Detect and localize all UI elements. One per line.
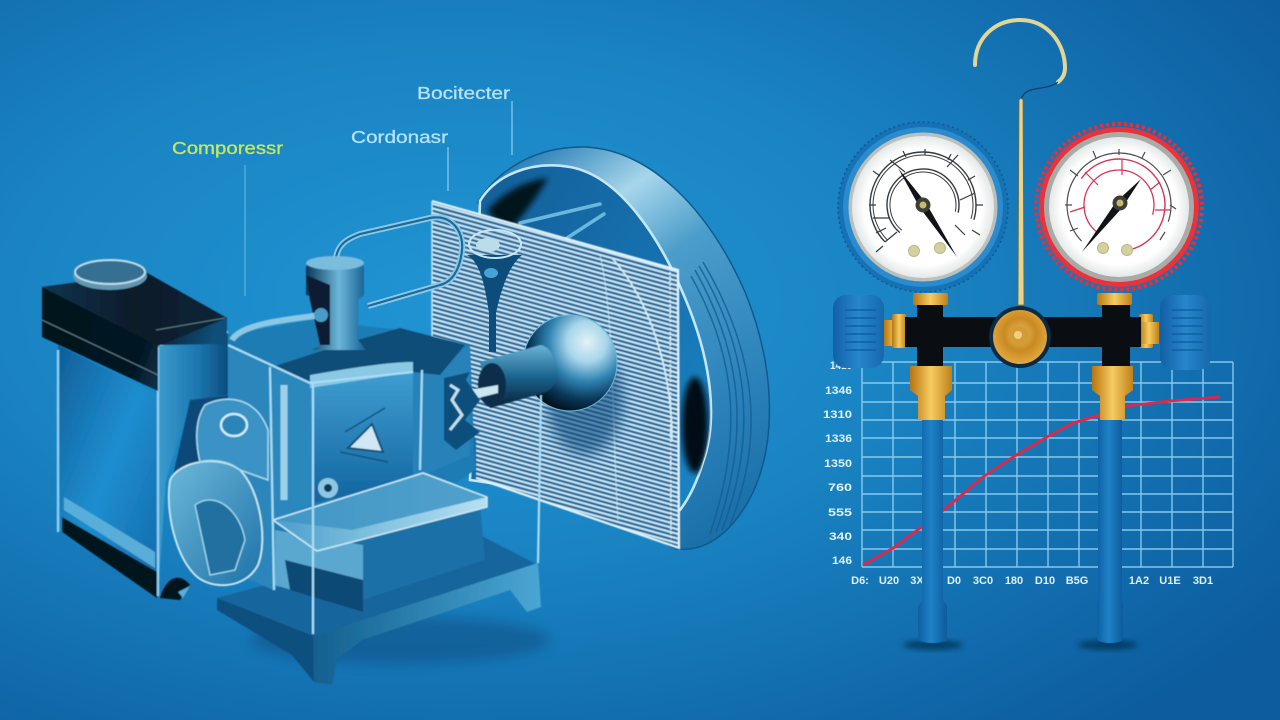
body emblem [348, 424, 383, 452]
condenser panel [432, 201, 679, 548]
black manifold body [905, 303, 1141, 366]
wheel rim [478, 147, 769, 549]
label: accumulator: Bocitecter [417, 83, 510, 103]
right gauge scale [1045, 131, 1193, 279]
left needle [898, 168, 957, 257]
x axis labels: U20 [879, 575, 899, 587]
chart grid [862, 362, 1233, 567]
x axis labels: B5G [1066, 575, 1088, 587]
base front right [313, 563, 541, 685]
y axis labels: 1346 [825, 385, 852, 397]
hose shadows [903, 640, 963, 650]
left gauge [838, 122, 1008, 292]
receiver tank [42, 260, 228, 600]
wheel interior shadows [488, 178, 708, 473]
base plate [217, 530, 538, 640]
y axis labels: 555 [828, 507, 852, 519]
coupling shaft [480, 345, 557, 408]
right gauge dots [1098, 242, 1108, 254]
x axis labels: D0 [947, 575, 961, 587]
tank right face [158, 332, 228, 595]
compressor assembly [169, 256, 557, 685]
y axis labels: 340 [829, 531, 852, 543]
y axis labels: 1350 [824, 458, 852, 470]
right bay [413, 345, 470, 480]
motor [169, 461, 262, 585]
tank left face [58, 345, 158, 595]
brass collars [913, 293, 948, 305]
hub shadow on panel [547, 345, 623, 455]
frame struts [228, 345, 541, 634]
panel fins [432, 201, 679, 548]
tank cap [73, 262, 147, 290]
tank black head [42, 273, 227, 391]
tank frame lines [58, 332, 228, 596]
x axis labels: 3C0 [973, 575, 993, 587]
central hub [523, 315, 617, 411]
left hose [918, 418, 947, 643]
wheel spokes [520, 204, 604, 238]
right needle [1082, 179, 1141, 252]
cushion top [273, 473, 487, 551]
right hose [1097, 418, 1123, 643]
motor upper housing [197, 399, 268, 480]
lower brass fittings [910, 366, 952, 420]
center tube [1018, 98, 1024, 305]
chart [823, 360, 1233, 587]
label: accumulator [417, 83, 512, 155]
label: condenser [351, 127, 448, 191]
x axis labels: U1E [1159, 575, 1181, 587]
gear detail [444, 372, 480, 450]
panel arc [612, 258, 672, 440]
x axis labels: 3X [910, 575, 924, 587]
low pipe [232, 315, 322, 340]
y axis labels: 146 [832, 555, 852, 567]
label: compressor: Comporessr [172, 138, 283, 158]
y axis labels: 1336 [825, 433, 852, 445]
x axis labels [851, 575, 1213, 587]
knobs [833, 295, 884, 368]
base front left [217, 598, 314, 682]
x axis labels: D6: [851, 575, 869, 587]
x axis labels: D10 [1035, 575, 1055, 587]
mid body front face [310, 372, 413, 503]
red curve [863, 397, 1220, 565]
wheel ribs [691, 262, 751, 534]
center brass valve [989, 306, 1051, 368]
tank wheel [160, 578, 190, 600]
pipe to condenser [335, 217, 462, 306]
wheel opening [470, 165, 711, 510]
left gauge scale [848, 130, 998, 280]
housing back [228, 320, 475, 590]
cushion lower block [333, 505, 485, 600]
mid body side panel [272, 367, 313, 520]
upper shoulder [272, 328, 465, 383]
x axis labels: 3D1 [1193, 575, 1213, 587]
condenser wheel [470, 147, 769, 549]
floor shadow under the compressor [250, 616, 550, 664]
y axis labels [823, 360, 852, 567]
tank lower band [62, 517, 157, 598]
x axis labels: 180 [1005, 575, 1023, 587]
y axis labels: 1410 [830, 360, 852, 372]
right gauge [1036, 124, 1202, 290]
housing left panel [228, 345, 273, 590]
left gauge dots [908, 246, 920, 256]
panel frame [432, 201, 679, 548]
manifold gauge set [833, 20, 1211, 650]
label: condenser: Cordonasr [351, 127, 448, 147]
sight ring [318, 478, 338, 498]
side nuts [884, 320, 908, 346]
dark motor recess [172, 395, 228, 480]
x axis labels: 1A2 [1129, 575, 1149, 587]
y axis labels: 760 [828, 482, 852, 494]
cylinder [306, 260, 366, 350]
y axis labels: 1310 [823, 409, 852, 421]
hook [975, 20, 1065, 82]
funnel valve [467, 230, 522, 352]
